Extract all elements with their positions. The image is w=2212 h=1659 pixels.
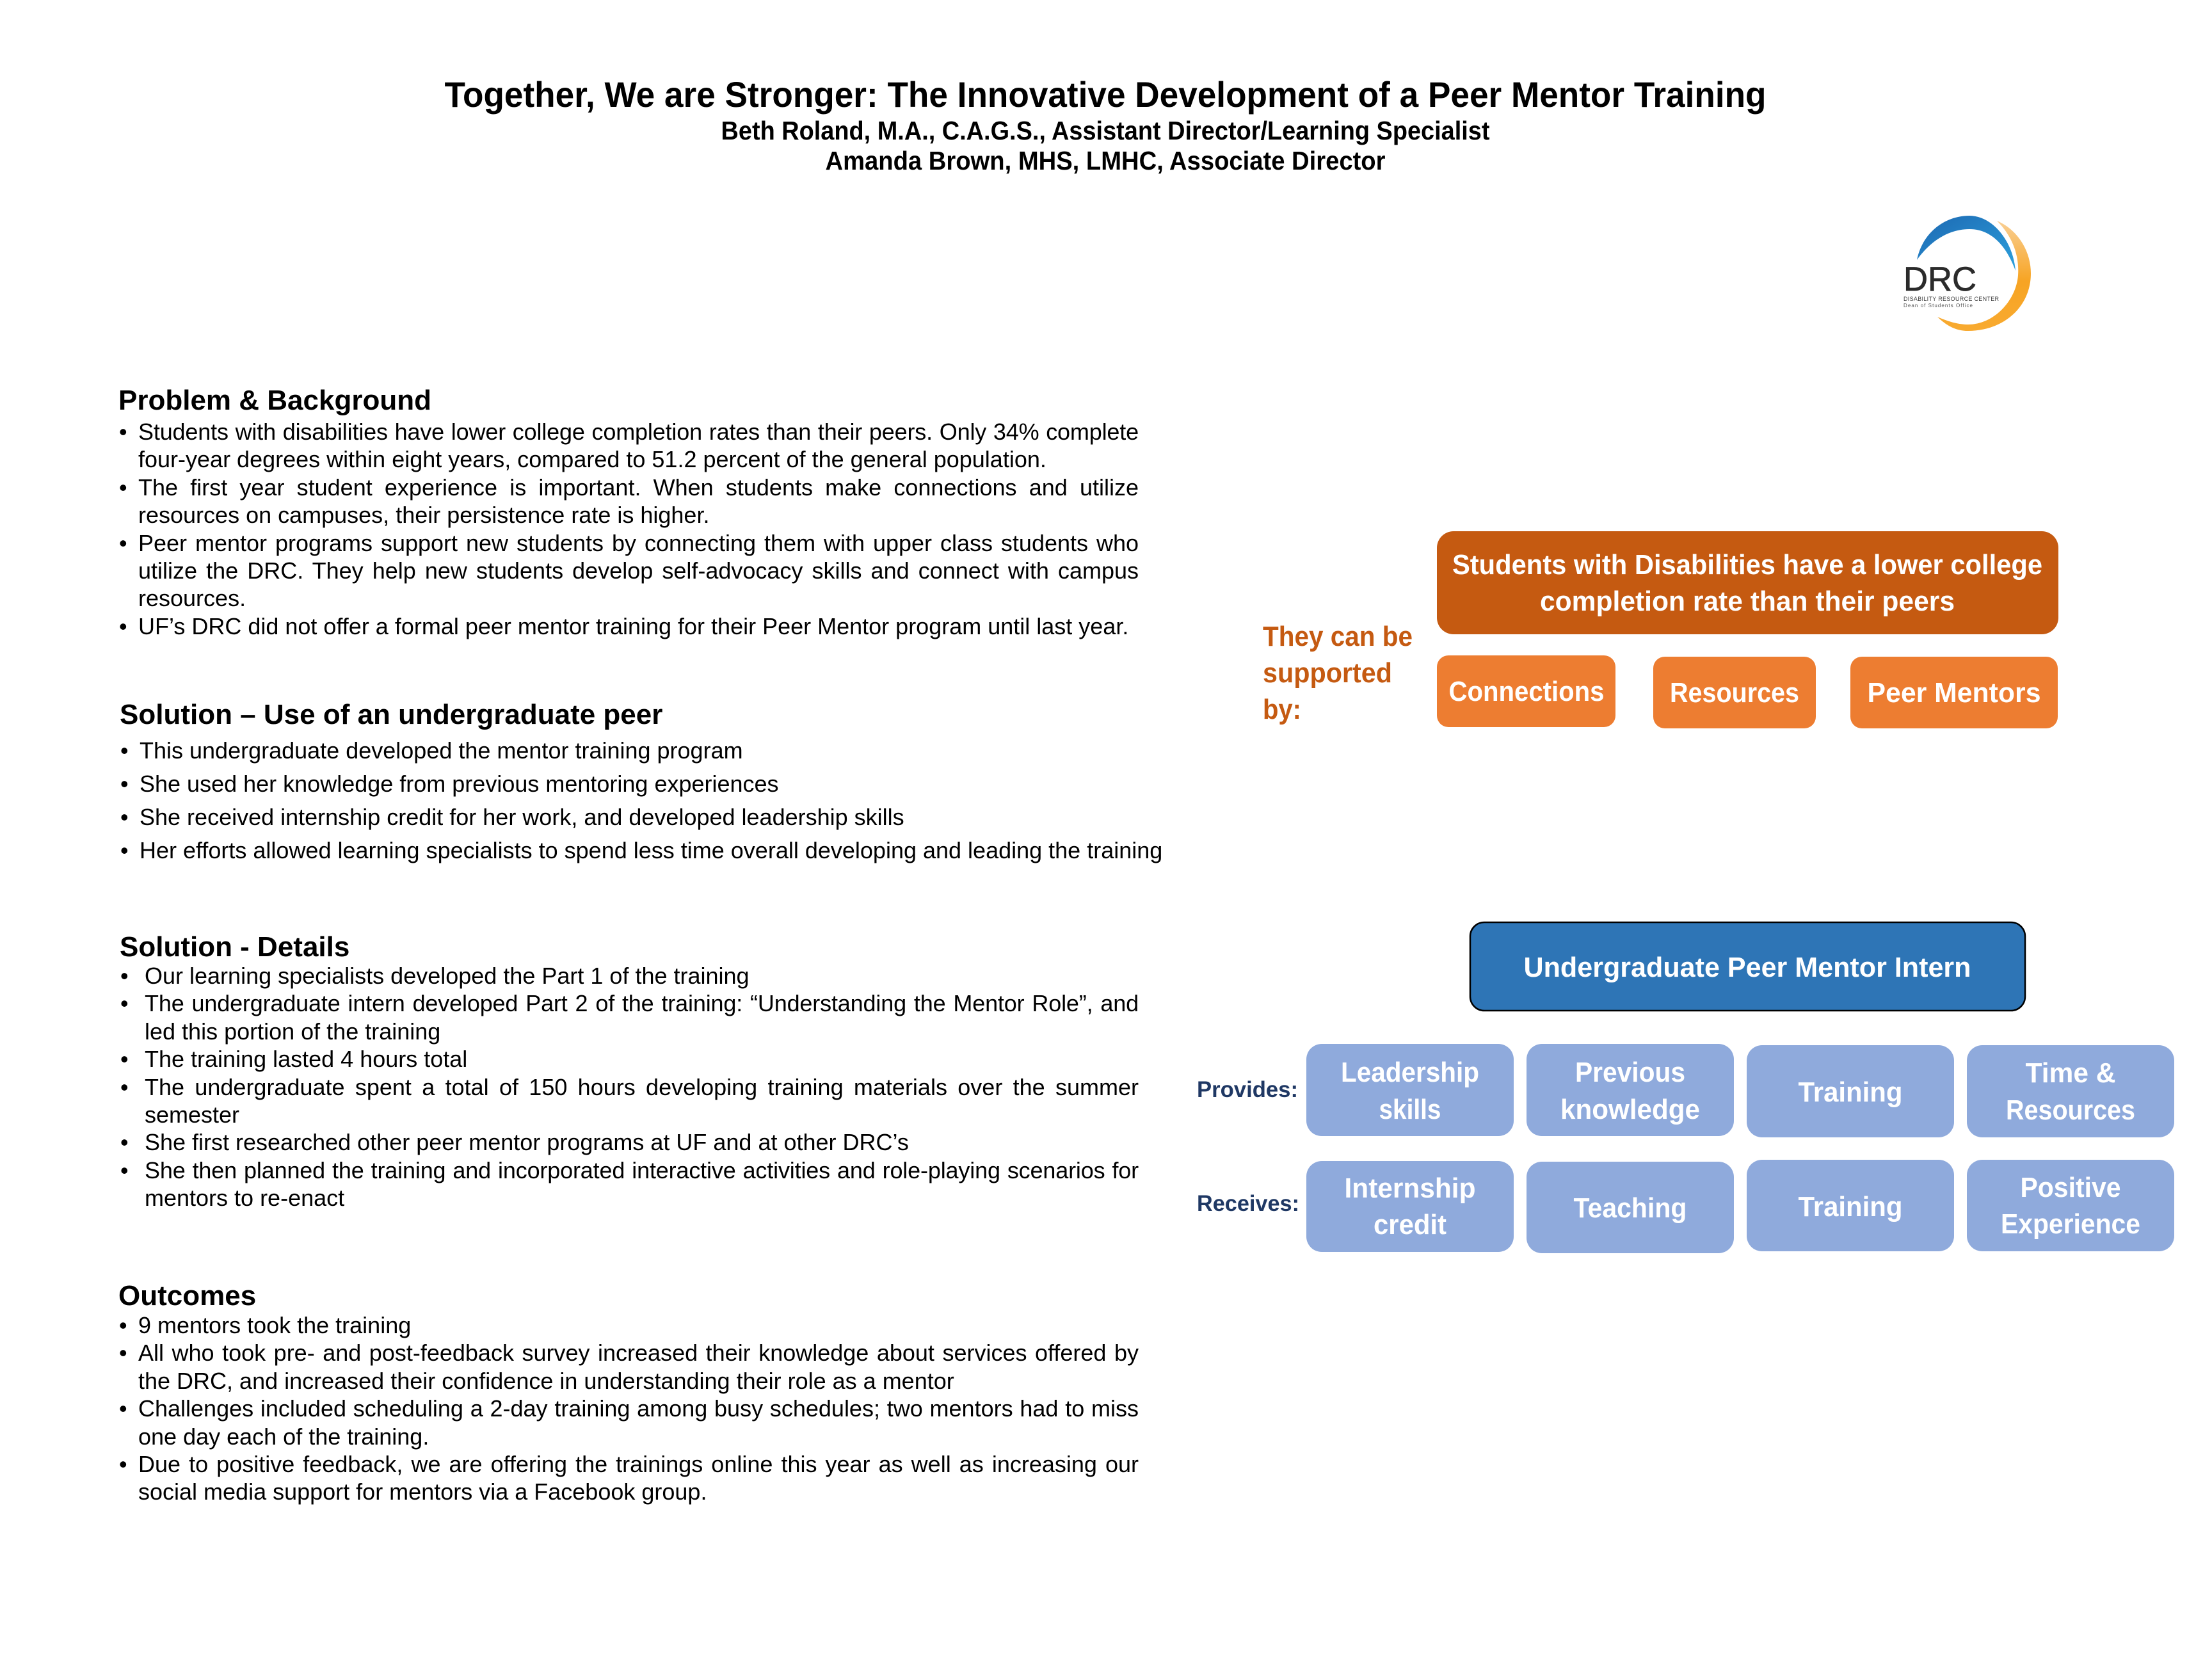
box: time and resources: Time &: [2025, 1057, 2116, 1089]
text block: outcomes bullets: [138, 1311, 1139, 1506]
text block: outcomes bullets: social media support for mentors via a Facebook group.: [138, 1479, 707, 1505]
box: peer mentors: [1850, 657, 2058, 728]
text block: solution details bullets: semester: [145, 1102, 239, 1128]
text block: outcomes bullets: the DRC, and increased their confidence in understanding their role as a mentor: [138, 1368, 954, 1394]
panel: solution, use of an undergraduate peer: [120, 699, 1162, 863]
box: positive experience: Experience: [2001, 1208, 2140, 1240]
icon: DRC logo: Dean of Students Office: [1903, 303, 1973, 309]
text block: solution details bullets: led this portion of the training: [145, 1018, 440, 1045]
box: resources: Resources: [1670, 677, 1799, 709]
text block: problem bullets: Students with disabilities have lower college completion rates than their peers. Only 34% complete: [138, 419, 1139, 445]
box: leadership skills: [1306, 1044, 1514, 1136]
text block: problem bullets: four-year degrees within eight years, compared to 51.2 percent of the general population.: [138, 446, 1046, 472]
text block: solution details bullets: mentors to re-enact: [145, 1185, 344, 1211]
box: positive experience: Positive: [2020, 1172, 2121, 1203]
heading: problem and background: Problem & Background: [118, 385, 431, 416]
box: resources: [1653, 657, 1816, 728]
box: previous knowledge: Previous: [1575, 1057, 1685, 1088]
box: positive experience: [1967, 1160, 2174, 1251]
text block: outcomes bullets: 9 mentors took the training: [138, 1312, 411, 1338]
box: teaching: Teaching: [1573, 1192, 1687, 1224]
box: lower completion rate: completion rate than their peers: [1540, 586, 1955, 617]
text block: solution peer bullets: [121, 737, 1162, 863]
label: they can be supported by: supported: [1263, 657, 1392, 689]
text block: problem bullets: [120, 419, 1139, 639]
box: peer mentors: Peer Mentors: [1868, 677, 2040, 709]
box: internship credit: [1306, 1161, 1514, 1252]
text block: problem bullets: The first year student experience is important. When students make connections and utilize: [138, 474, 1139, 501]
heading: outcomes: Outcomes: [118, 1280, 256, 1311]
box: connections: Connections: [1449, 676, 1604, 707]
box: undergraduate peer mentor intern: [1470, 922, 2025, 1011]
box: training received: [1747, 1160, 1954, 1251]
text block: problem bullets: Peer mentor programs support new students by connecting them with upper class students who: [138, 530, 1139, 556]
icon: DRC logo: DISABILITY RESOURCE CENTER: [1903, 296, 2000, 302]
text block: solution details bullets: She then planned the training and incorporated interactive activities and role-playing scenarios for: [145, 1157, 1139, 1183]
box: undergraduate peer mentor intern: Undergraduate Peer Mentor Intern: [1523, 952, 1971, 983]
text block: solution details bullets: The undergraduate spent a total of 150 hours developing training materials over the summer: [145, 1074, 1139, 1100]
text block: solution details bullets: [121, 963, 1139, 1211]
box: training received: Training: [1799, 1191, 1902, 1222]
text block: solution details bullets: The undergraduate intern developed Part 2 of the training: “Understanding the Mentor Role”, and: [145, 990, 1139, 1016]
box: internship credit: Internship: [1344, 1173, 1476, 1204]
label: they can be supported by: by:: [1263, 694, 1301, 725]
text block: problem bullets: resources.: [138, 585, 246, 611]
text block: problem bullets: resources on campuses, their persistence rate is higher.: [138, 502, 709, 528]
text block: solution peer bullets: She used her knowledge from previous mentoring experiences: [140, 771, 779, 797]
label: they can be supported by: They can be: [1263, 621, 1413, 652]
box: internship credit: credit: [1374, 1209, 1447, 1240]
box: leadership skills: skills: [1379, 1094, 1441, 1125]
title block: [444, 74, 1767, 175]
panel: outcomes: [118, 1279, 1142, 1513]
title: Together, We are Stronger: The Innovative Development of a Peer Mentor Training: [444, 74, 1767, 115]
author: Beth Roland: Beth Roland, M.A., C.A.G.S., Assistant Director/Learning Specialist: [721, 116, 1490, 145]
box: previous knowledge: knowledge: [1560, 1094, 1700, 1125]
box: time and resources: [1967, 1045, 2174, 1137]
box: lower completion rate: Students with Disabilities have a lower college: [1452, 549, 2042, 581]
text block: solution details bullets: Our learning specialists developed the Part 1 of the training: [145, 963, 749, 989]
text block: outcomes bullets: Due to positive feedback, we are offering the trainings online this year as well as increasing our: [138, 1451, 1139, 1477]
text block: problem bullets: utilize the DRC. They help new students develop self-advocacy skills and connect with campus: [138, 557, 1139, 584]
box: training provided: [1747, 1045, 1954, 1137]
text block: solution peer bullets: Her efforts allowed learning specialists to spend less time overall developing and leading the training: [140, 837, 1162, 863]
box: teaching: [1527, 1162, 1734, 1253]
text block: solution details bullets: She first researched other peer mentor programs at UF and at other DRC’s: [145, 1129, 909, 1155]
text block: problem bullets: UF’s DRC did not offer a formal peer mentor training for their Peer Mentor program until last year.: [138, 613, 1128, 639]
panel: problem and background: [118, 385, 1139, 639]
text block: solution peer bullets: She received internship credit for her work, and developed leadership skills: [140, 804, 904, 830]
label: provides: Provides:: [1197, 1077, 1298, 1102]
text block: outcomes bullets: All who took pre- and post-feedback survey increased their knowledge about services offered by: [138, 1340, 1139, 1366]
icon: DRC logo: [1903, 216, 2031, 331]
label: they can be supported by: [1263, 621, 1413, 725]
box: previous knowledge: [1527, 1044, 1734, 1136]
box: training provided: Training: [1799, 1077, 1902, 1108]
text block: solution details bullets: The training lasted 4 hours total: [145, 1046, 467, 1072]
box: connections: [1437, 655, 1615, 727]
box: leadership skills: Leadership: [1341, 1057, 1479, 1088]
text block: outcomes bullets: Challenges included scheduling a 2-day training among busy schedules; two mentors had to miss: [138, 1395, 1139, 1422]
author: Amanda Brown: Amanda Brown, MHS, LMHC, Associate Director: [826, 146, 1386, 175]
label: receives: Receives:: [1197, 1191, 1299, 1216]
text block: outcomes bullets: one day each of the training.: [138, 1423, 429, 1450]
icon: DRC logo: DRC: [1903, 260, 1976, 298]
text block: solution peer bullets: This undergraduate developed the mentor training program: [140, 737, 743, 764]
panel: solution details: [120, 931, 1139, 1211]
box: lower completion rate: [1437, 531, 2058, 634]
diagram: undergraduate peer mentor intern: [1197, 922, 2174, 1253]
diagram: students with disabilities: [1263, 531, 2058, 728]
heading: solution peer: Solution – Use of an undergraduate peer: [120, 699, 662, 730]
heading: solution details: Solution - Details: [120, 931, 349, 963]
box: time and resources: Resources: [2006, 1094, 2135, 1126]
